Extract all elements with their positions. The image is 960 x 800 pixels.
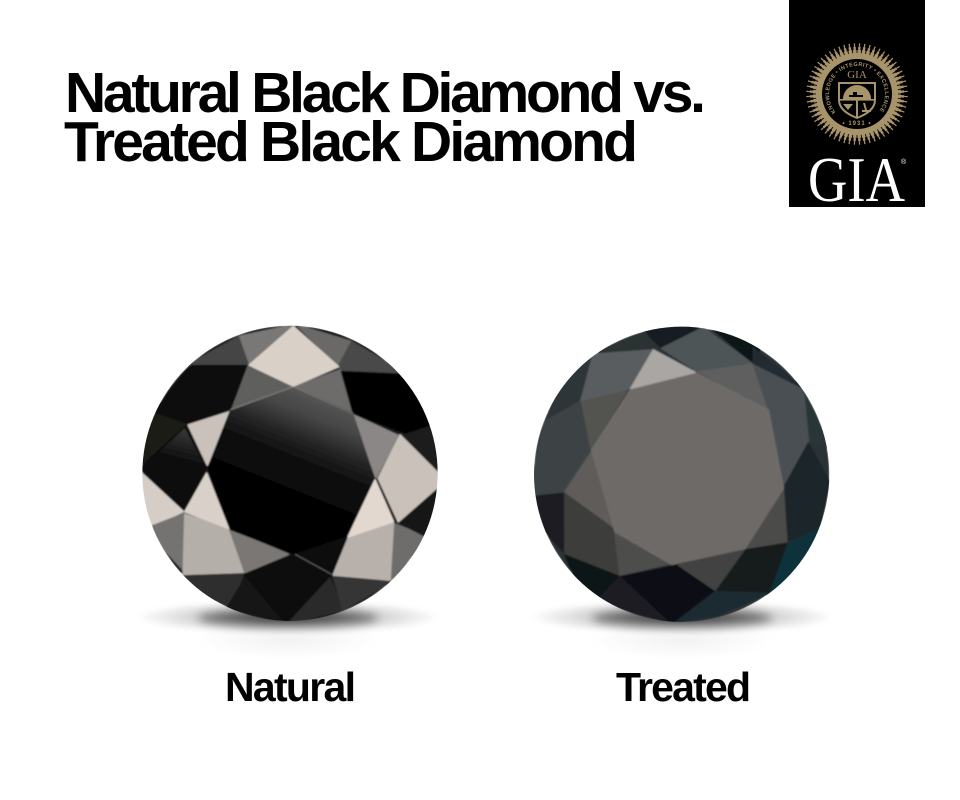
icon: GIA seal: GIA xyxy=(847,69,867,81)
icon: GIA seal: • 1931 • xyxy=(843,121,871,127)
title: Treated Black Diamond xyxy=(64,110,638,174)
natural diamond xyxy=(140,325,440,623)
title xyxy=(64,61,706,174)
label: natural: Natural xyxy=(225,664,356,710)
treated diamond xyxy=(533,325,832,623)
title: Natural Black Diamond vs. xyxy=(65,61,706,125)
GIA logo panel xyxy=(789,0,925,215)
logo wordmark: ® xyxy=(901,158,907,166)
logo wordmark: GIA xyxy=(808,144,905,215)
treated diamond shadow xyxy=(530,600,834,660)
label: treated: Treated xyxy=(616,664,751,710)
icon: GIA seal: KNOWLEDGE • INTEGRITY • EXCELLENCE xyxy=(825,62,889,114)
natural diamond shadow xyxy=(136,600,440,660)
icon: GIA seal xyxy=(806,43,908,145)
